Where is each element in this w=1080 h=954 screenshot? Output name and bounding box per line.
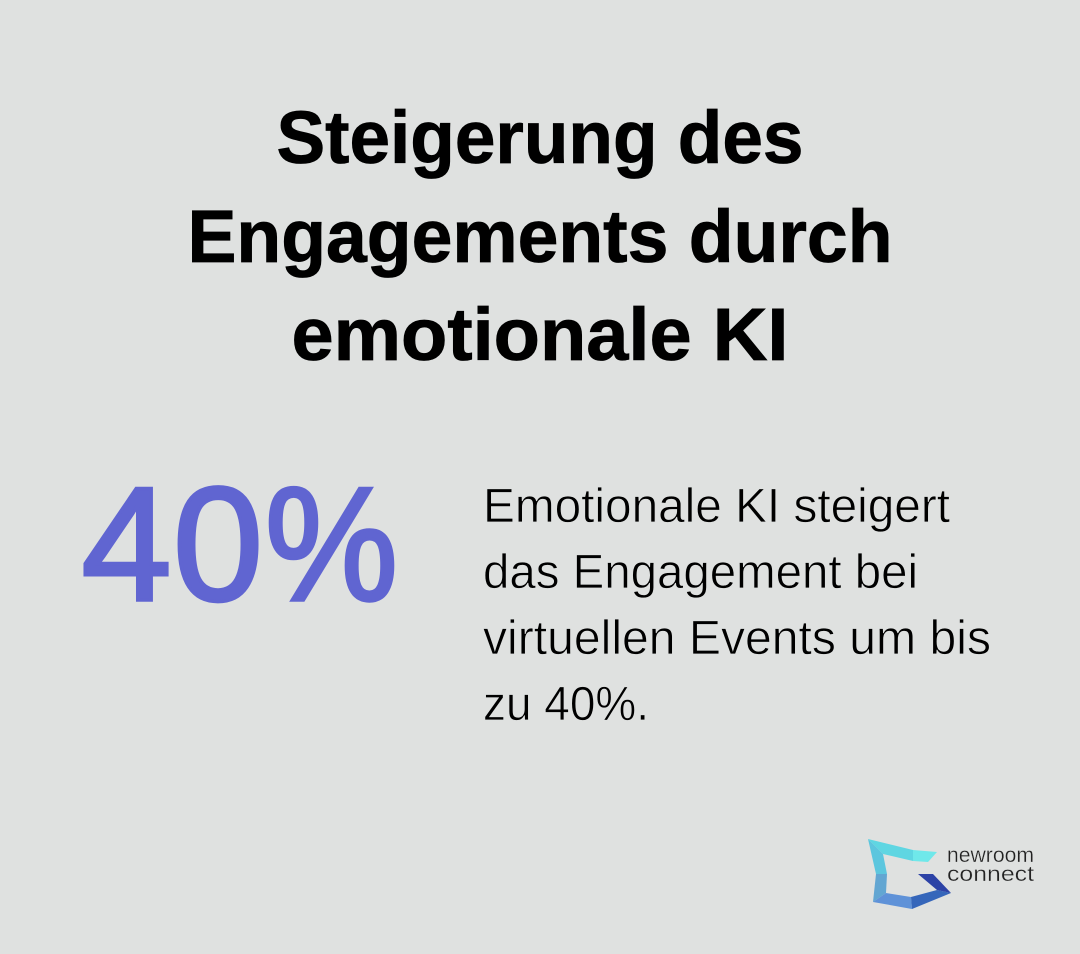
description text: virtuellen Events um bis (483, 612, 991, 665)
title (188, 96, 892, 376)
title: emotionale KI (292, 293, 788, 376)
logo wordmark: connect (947, 863, 1034, 886)
title: Steigerung des (276, 96, 804, 179)
description text: das Engagement bei (483, 546, 918, 599)
logo wordmark: newroom (947, 844, 1034, 867)
big statistic: 40%: % (265, 454, 398, 635)
big statistic: 40%: 0 (173, 454, 263, 635)
title: Engagements durch (188, 195, 892, 278)
logo wordmark (947, 844, 1034, 886)
icon: logo mark (868, 839, 951, 909)
description text (483, 480, 991, 731)
big statistic: 40%: 4 (82, 454, 172, 635)
description text: Emotionale KI steigert (483, 480, 950, 533)
logo: newroom connect (868, 839, 1034, 909)
description text: zu 40%. (483, 678, 649, 731)
